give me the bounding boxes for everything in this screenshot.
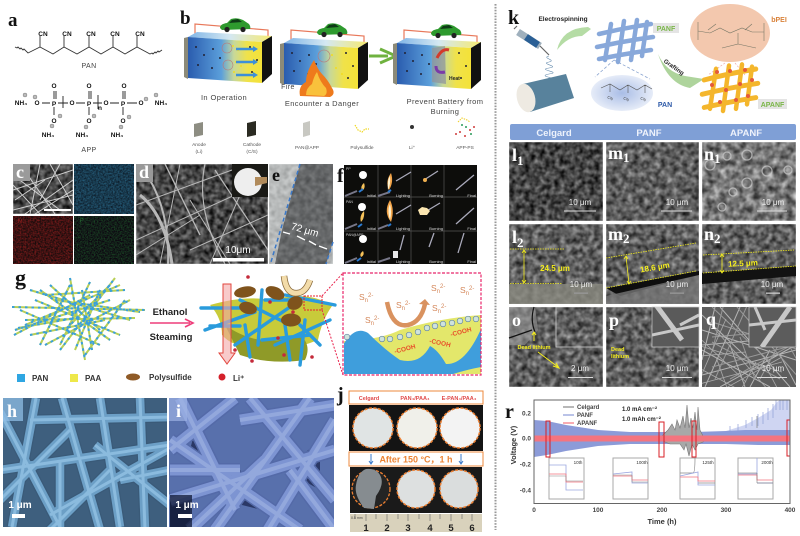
label: electrospinning: Electrospinning [538,16,588,23]
plot frame [534,400,790,504]
sample header [349,391,483,404]
panel letter r: r [505,401,514,423]
polysulfide labels: n [402,306,405,312]
polysulfide labels: 2- [441,304,446,310]
PANF mesh [597,20,653,62]
x axis labels: 400 [785,507,796,514]
ruler: 1 [363,523,369,534]
panel l1: Celgard surface: l [512,145,517,165]
panel m1: PANF surface: 1 [623,150,630,165]
inset photo [232,164,268,197]
red transmission arrow [219,284,235,364]
APP structure: P [121,101,126,108]
PAN structure [15,31,162,70]
panel q: APANF surface after cycling: 10 μm [762,364,785,373]
panel m2: PANF cross-section: 18.6 μm [639,260,670,275]
legend: components: Cathode [243,142,261,148]
PAN structure: CN [135,31,145,38]
caption: encounter a danger: Encounter a Danger [285,99,359,108]
column header band: APANF [730,128,762,139]
flames and samples: PP [346,167,351,171]
PANF label [653,23,679,33]
label: steaming: Steaming [150,332,193,343]
caption: in operation: In Operation [201,93,247,102]
column header band: Celgard [536,128,572,139]
panel letter j: j [336,384,344,406]
polysulfide labels: n [371,321,374,327]
APP structure: O [138,100,144,107]
panel l1: Celgard surface: 10 μm [569,198,592,207]
PANF spikes on the right [726,400,790,438]
column header band [510,124,796,140]
element labels: C [78,167,82,173]
APANF band [534,436,790,442]
panel o: Celgard dead lithium: 2 μm [571,364,589,373]
collector drum [514,74,574,114]
panel n2: APANF cross-section: 10 μm [761,280,784,289]
panel n2: APANF cross-section: 2 [714,231,721,246]
polysulfide labels: S [432,303,438,313]
panel q: APANF surface after cycling: q [706,309,716,329]
ruler: 2 [384,523,390,534]
spinning jet spiral [545,56,554,81]
ruler: 4 [427,523,433,534]
chart legend [563,405,600,427]
panel h: blue fibre micrograph [0,398,170,530]
panel p: PANF dead lithium: lithium [611,354,629,360]
inset: 200th cycle: 200th [761,460,773,465]
element labels: N [18,219,22,225]
polysulfide labels: S [431,283,437,293]
inset: 10th cycle [549,458,584,499]
panel i: violet-blue fibre micrograph [169,398,335,530]
PAN label: PAN [658,102,672,109]
legend: components: (C/S) [246,149,258,155]
chart legend: APANF [577,421,598,427]
legend: components [192,118,475,155]
polysulfide labels: 2- [368,293,373,299]
flames and samples: Burning [429,193,443,198]
y axis labels: 0.0 [522,436,531,442]
panel o: Celgard dead lithium [509,307,603,387]
battery protected: Heat [449,76,460,82]
grafting arrow: Grafting [662,59,685,77]
panel m2: PANF cross-section: m [608,224,623,244]
flames and samples: Final [467,226,476,231]
element labels [18,167,84,225]
polysulfide labels: 2- [405,301,410,307]
carboxyl labels: -COOH [450,326,473,339]
panel q: APANF surface after cycling [702,306,796,387]
polysulfide labels: n [438,309,441,315]
panel p: PANF dead lithium: p [609,310,619,330]
PAN structure: CN [110,31,120,38]
panel l1: Celgard surface: 1 [517,153,524,168]
pink arrow [150,319,193,327]
selection box [304,296,322,310]
scale bar [175,500,199,518]
fire [300,60,334,97]
bPEI bubble [690,4,770,75]
measurement label: 72 μm [290,221,320,240]
panel l1: Celgard surface [509,142,603,221]
APP structure: n [98,105,102,112]
panel l2: Celgard cross-section: 24.5 μm [540,264,570,273]
APP structure: O [86,83,92,90]
PAN molecule bubble [591,60,653,111]
panel m2: PANF cross-section: 10 μm [666,280,689,289]
panel m1: PANF surface [606,142,699,221]
legend: components: Polysulfide [350,145,374,151]
APP structure: NH₄ [42,132,54,139]
APANF label [758,99,787,109]
panel c: SEM and element maps [13,162,134,264]
panel m2: PANF cross-section [606,224,699,304]
x axis labels: 300 [721,507,732,514]
panel n1: APANF surface: 1 [714,151,721,166]
legend: PAN PAA polysulfide Li: PAN [32,374,49,383]
panel letter i [169,398,187,421]
highlighted red windows [546,420,790,457]
heating condition strip [349,452,483,466]
polysulfide labels: S [359,292,365,302]
panel l2: Celgard cross-section [509,224,603,304]
panel p: PANF dead lithium: Dead [611,347,624,353]
minus-charged surface groups [344,316,479,342]
legend: components: Li⁺ [409,145,416,151]
panel n1: APANF surface: 10 μm [762,198,785,207]
carboxyl labels: -COOH [394,343,417,356]
y axis labels: -0.2 [520,462,531,468]
legend: components: PAN@APP [295,145,319,151]
battery encountering fire [280,23,368,97]
tan rejected arrow [284,276,310,293]
panel m1: PANF surface: 10 μm [666,198,689,207]
sample header: PAN₄/PAA₄ [400,396,430,402]
x axis labels: 200 [657,507,668,514]
Celgard spikes [660,405,706,456]
APP structure: O [121,83,127,90]
APP structure: NH₄ [155,100,167,107]
panel letter i: i [176,401,181,421]
sample header: Celgard [359,396,379,402]
panel a: chemical structures [8,10,167,154]
ruler: 5 [448,523,454,534]
panel l2: Celgard cross-section: l [512,227,517,247]
panel k: electrospinning and grafting schematic [508,4,787,114]
ruler [350,514,482,534]
polysulfide labels: n [437,289,440,295]
legend: components: (Li) [196,149,203,155]
APP structure [15,83,167,154]
legend: PAN PAA polysulfide Li: PAA [85,374,102,383]
APP structure: O [34,100,40,107]
flames and samples: PAN [346,200,353,204]
panel f: flame test photos [337,165,477,264]
scale bar [8,500,32,518]
panel n1: APANF surface [702,142,796,221]
panel o: Celgard dead lithium: o [512,310,521,330]
APP structure: O [51,83,57,90]
photos before heating [349,405,483,451]
polysulfide labels: n [466,291,469,297]
test conditions: 1.0 mA cm⁻² [622,407,657,413]
grafting arrow [658,54,704,88]
flames and samples: Final [467,259,476,264]
flames and samples: Lighting [396,259,410,264]
polysulfide labels: 2- [469,286,474,292]
APANF label: APANF [761,102,785,109]
caption: prevent battery from burning: Burning [431,107,459,116]
panel n2: APANF cross-section: 12.5 μm [728,258,758,269]
PAN structure: CN [62,31,72,38]
ruler: 6 [469,523,475,534]
panel letter h: h [7,401,17,421]
y axis title: Voltage (V) [509,425,518,464]
caption: prevent battery from burning: Prevent Battery from [407,97,483,106]
panel letter b: b [180,8,191,29]
panel n1: APANF surface: n [704,144,714,164]
x axis labels [532,507,796,514]
panel p: PANF dead lithium: 10 μm [666,364,689,373]
chart legend: Celgard [577,405,600,411]
polysulfide labels: n [365,298,368,304]
panel l2: Celgard cross-section: 2 [517,235,524,250]
bPEI label: bPEI [771,17,787,24]
panel j: thermal shrinkage photos [336,384,483,534]
inset: 10th cycle: 10th [574,460,583,465]
panel g: ethanol steaming schematic [12,265,481,383]
panel n2: APANF cross-section [702,224,796,304]
panel letter a: a [8,10,18,31]
scale bar: 1 μm [175,500,199,511]
scale bar: 10μm [225,245,251,256]
polysulfide labels [359,283,474,327]
panel letter k: k [508,7,520,29]
steamed network with polysulfides [201,275,335,365]
legend: PAN PAA polysulfide Li [17,373,244,383]
inset: 100th cycle: 100th [636,460,648,465]
inset: 200th cycle [738,458,773,499]
ruler: 3 [405,523,411,534]
PAN molecule bubble: CN [623,95,630,102]
flames and samples: Initial [367,193,376,198]
column header band: PANF [636,128,662,139]
APP structure: P [52,101,57,108]
x axis title: Time (h) [647,517,677,526]
panel o: Celgard dead lithium: Dead lithium [517,345,551,351]
y axis labels [520,410,531,494]
flames and samples: Burning [429,226,443,231]
green curved arrow [557,27,591,50]
inset: 100th cycle [613,458,648,499]
flames and samples: Lighting [396,193,410,198]
syringe [514,26,549,55]
panel m2: PANF cross-section: 2 [623,231,630,246]
polysulfide labels: S [365,315,371,325]
APP structure: APP [81,147,97,154]
flames and samples: Initial [367,259,376,264]
panel letter f: f [337,165,344,187]
flames and samples: Initial [367,226,376,231]
flames and samples [345,167,476,264]
polysulfide labels: 2- [374,316,379,322]
plot axes [534,400,790,504]
polysulfide labels: 2- [440,284,445,290]
panel letter g: g [15,265,26,290]
APP structure: O [86,118,92,125]
flames and samples: Burning [429,259,443,264]
battery in operation [184,18,272,83]
polysulfide labels: S [460,285,466,295]
panel d: fibre SEM with inset [136,162,268,264]
heating condition strip: After 150 °C，1 h [379,454,453,464]
photos after heating [350,467,482,513]
APP structure: O [120,118,126,125]
panel e: TEM image [269,164,333,264]
element labels: P [80,218,84,224]
panel letter h [3,398,23,421]
legend: components: Anode [192,142,206,148]
APANF mesh [702,65,758,111]
y axis labels: 0.2 [522,410,531,418]
polysulfide labels: S [396,300,402,310]
flames and samples: Lighting [396,226,410,231]
inset: 125th cycle [680,458,715,499]
APP structure: NH₄ [15,100,27,107]
ruler: 0.5 mm [351,516,363,520]
scale bar: 1 μm [8,500,32,511]
APP structure: O [51,118,57,125]
caption: fire: Fire [281,84,295,91]
panel r: voltage profile chart [505,400,796,526]
legend: PAN PAA polysulfide Li: Polysulfide [149,373,192,382]
battery protected [393,24,481,89]
PAN structure: CN [38,31,48,38]
APP structure: NH₄ [76,132,88,139]
panel m1: PANF surface: m [608,143,623,163]
test conditions: 1.0 mAh cm⁻² [622,416,661,423]
flames and samples: Final [467,193,476,198]
inset: 125th cycle: 125th [702,460,714,465]
panel letter c: c [16,162,24,182]
PANF label: PANF [657,26,676,33]
PAN structure: CN [86,31,96,38]
PAN structure: PAN [81,63,97,70]
legend: PAN PAA polysulfide Li: Li⁺ [233,374,244,383]
x axis labels: 100 [593,507,604,514]
panel b: battery schematic [180,8,483,155]
dotted column divider [494,4,496,530]
carboxyl labels [394,326,473,356]
PAN molecule bubble: CN [607,94,614,101]
sample header: E-PAN₄/PAA₄ [442,396,477,402]
zoomed interface box [322,273,481,375]
y axis labels: -0.4 [520,488,531,494]
panel letter d: d [139,162,149,182]
label: ethanol: Ethanol [153,307,187,318]
legend: components: APP-PS [456,145,474,151]
panel letter e: e [272,165,280,185]
green arrow [369,49,396,63]
panel n2: APANF cross-section: n [704,224,714,244]
flames and samples: PAN@APP [346,233,364,237]
panel p: PANF dead lithium [606,305,699,387]
x axis labels: 0 [532,507,536,514]
carboxyl labels: -COOH [429,338,452,349]
curved rejection arrow [387,299,430,325]
APP structure: NH₄ [111,132,123,139]
panel l2: Celgard cross-section: 10 μm [570,280,593,289]
APP structure: O [103,100,109,107]
PAN molecule bubble: CN [640,95,647,102]
chart legend: PANF [577,413,593,419]
PANF band [534,420,790,457]
as-spun fibre network [12,278,145,360]
APP structure: O [69,100,75,107]
APP structure: P [87,101,92,108]
